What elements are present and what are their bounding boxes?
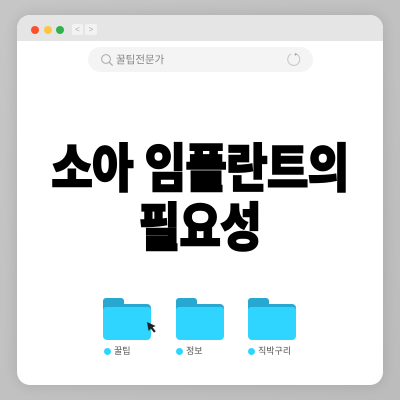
label text: 직박구리 <box>258 346 291 356</box>
label text: 정보 <box>186 346 203 356</box>
folder tab <box>103 298 124 312</box>
search bar <box>88 47 313 72</box>
title line 1: 소아 임플란트의 <box>51 127 348 202</box>
forward button <box>85 24 97 35</box>
label text: 꿀팁 <box>114 346 131 356</box>
label: 정보 <box>176 346 203 356</box>
folder front <box>176 307 224 340</box>
close button <box>31 26 39 34</box>
maximize button <box>56 26 64 34</box>
folder back <box>103 304 151 324</box>
search text: 꿀팁전문가 <box>116 54 164 66</box>
back button: < <box>75 25 80 34</box>
folder front <box>103 307 151 340</box>
back button <box>72 24 83 35</box>
label: 직박구리 <box>248 346 291 356</box>
label dot <box>104 348 111 355</box>
folder tab <box>248 298 269 312</box>
folder back <box>248 304 296 324</box>
folder: 정보 <box>176 298 224 340</box>
icon: reload <box>287 53 300 66</box>
title line 2: 필요성 <box>139 186 261 261</box>
icon: mouse cursor <box>147 322 156 332</box>
folder tab <box>176 298 197 312</box>
label dot <box>176 348 183 355</box>
minimize button <box>44 26 52 34</box>
title bar <box>17 15 383 41</box>
folder: 직박구리 <box>248 298 296 340</box>
icon: magnifier <box>101 54 113 66</box>
title <box>51 127 348 261</box>
window controls <box>31 26 64 34</box>
label dot <box>248 348 255 355</box>
label: 꿀팁 <box>104 346 131 356</box>
folder: 꿀팁 <box>103 298 151 340</box>
folder front <box>248 307 296 340</box>
forward button: > <box>89 25 93 34</box>
folder back <box>176 304 224 324</box>
